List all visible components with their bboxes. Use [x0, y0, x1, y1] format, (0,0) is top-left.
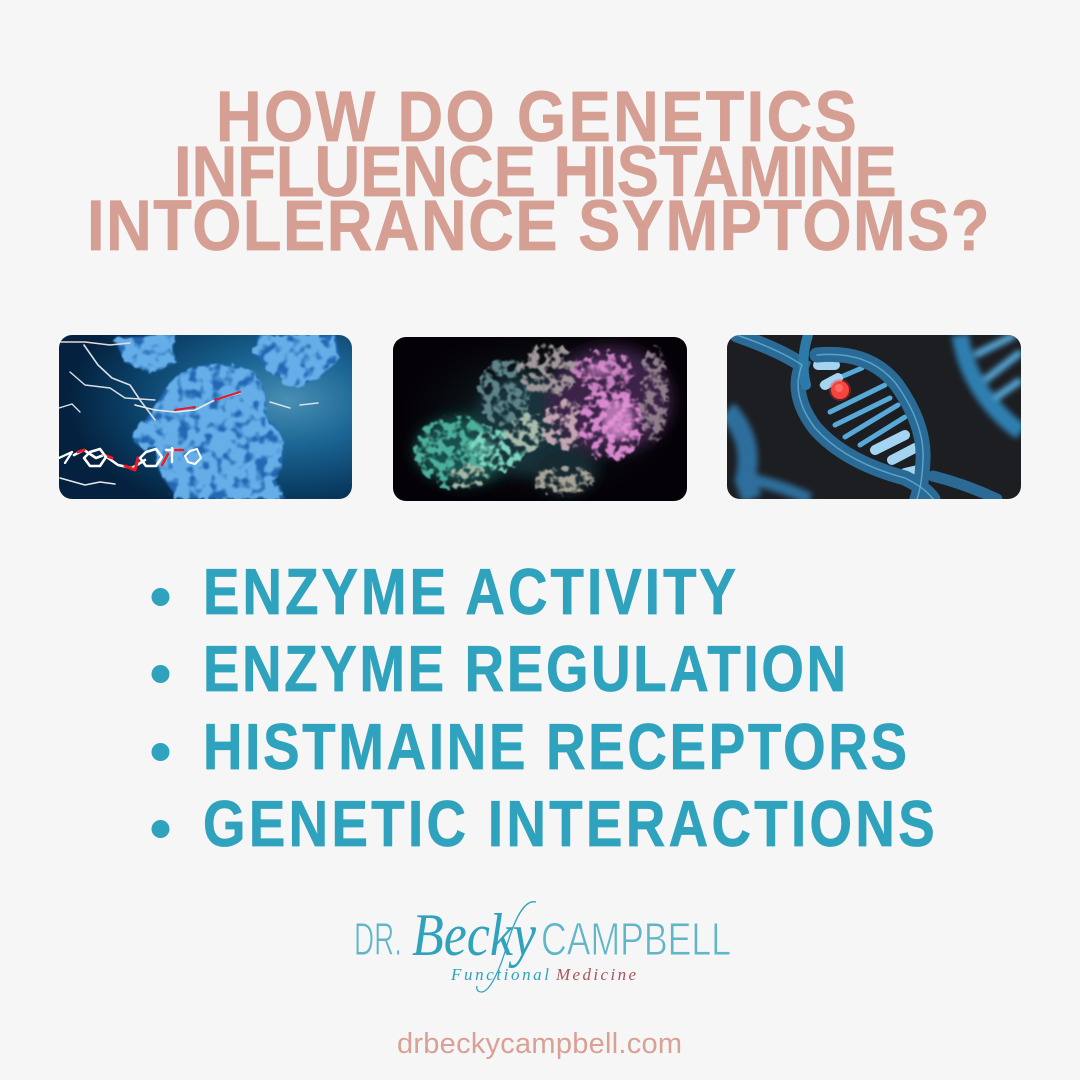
website url: drbeckycampbell.com: [397, 1028, 682, 1060]
bullet list: [152, 556, 935, 860]
title: INFLUENCE HISTAMINE: [174, 133, 897, 212]
image: teal and pink protein surface: [393, 325, 687, 505]
logo: Dr. Becky Campbell Functional Medicine: Becky: [412, 902, 536, 968]
logo: Dr. Becky Campbell Functional Medicine: DR.: [354, 913, 402, 965]
bullet: histmaine receptors: HISTMAINE RECEPTORS: [203, 711, 907, 783]
blue protein underlayer: [114, 335, 340, 499]
soft shadow body of the protein: [415, 346, 672, 494]
logo: Dr. Becky Campbell Functional Medicine: CAMPBELL: [541, 913, 731, 965]
logo: Dr. Becky Campbell Functional Medicine: [354, 902, 731, 992]
bullet: enzyme regulation: ENZYME REGULATION: [203, 633, 846, 705]
main helix: [737, 335, 997, 499]
bright magenta highlight: [464, 363, 634, 456]
logo: Dr. Becky Campbell Functional Medicine: Medicine: [555, 965, 636, 984]
bullet: enzyme activity: ENZYME ACTIVITY: [203, 556, 736, 628]
blue protein lumps: [114, 335, 340, 499]
title: INTOLERANCE SYMPTOMS?: [87, 187, 989, 266]
image: blue enzyme protein with molecules: [59, 335, 352, 499]
blurred background helices: [727, 335, 1021, 499]
molecule chains: [59, 342, 318, 485]
image: DNA helix with red marker: [727, 335, 1021, 499]
bullet: genetic interactions: GENETIC INTERACTIONS: [203, 788, 935, 860]
title: [87, 78, 989, 266]
logo: Dr. Becky Campbell Functional Medicine: Functional: [450, 965, 549, 984]
red marker: [829, 379, 851, 401]
title: HOW DO GENETICS: [216, 78, 857, 157]
mottled surface of the protein: [414, 344, 669, 494]
